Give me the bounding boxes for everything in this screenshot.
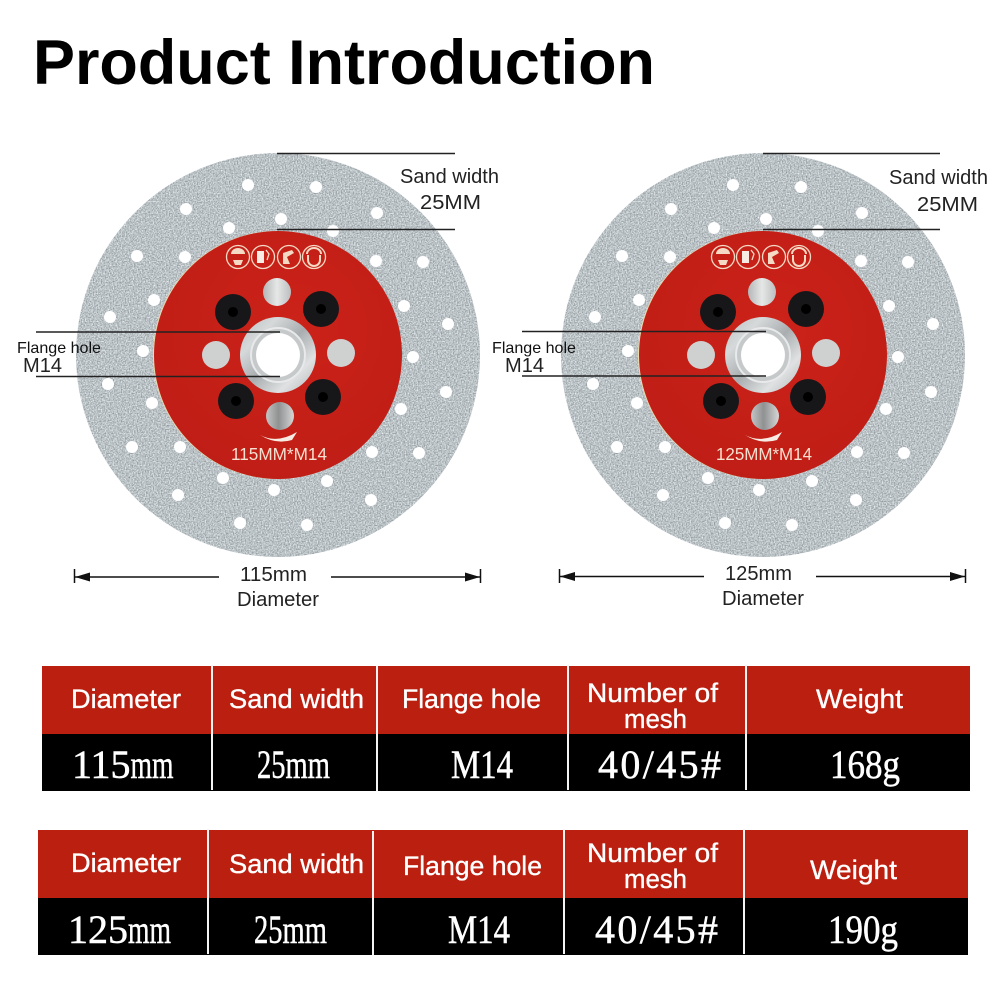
dimension: 115mm diameter: 115mm: [240, 563, 307, 586]
header labels: Diameter: [71, 684, 181, 714]
red centre label: [154, 231, 402, 479]
callout: right sand width: 25MM: [917, 193, 978, 216]
values: 25mm: [257, 742, 330, 787]
header row: [42, 666, 970, 734]
callout: left flange hole: [17, 332, 280, 377]
dimension: 115mm diameter: [74, 563, 481, 611]
header labels: Sand width: [229, 849, 364, 879]
callout: left sand width: Sand width: [400, 165, 499, 188]
values: 25mm: [254, 907, 327, 952]
header row: [38, 830, 968, 898]
value row: [42, 734, 970, 791]
values: 190g: [828, 907, 898, 952]
callout: right flange hole: [492, 332, 766, 377]
table: 125mm specs: [38, 829, 968, 955]
header labels: Number of: [587, 838, 719, 868]
values: [68, 907, 898, 952]
callout: left flange hole: Flange hole: [17, 340, 101, 357]
header labels: Number of: [587, 678, 719, 708]
safety icons: [226, 246, 326, 268]
dimension: 125mm diameter: Diameter: [722, 587, 804, 610]
header labels: Weight: [816, 684, 904, 714]
central flange hub: [240, 317, 316, 393]
callout: right sand width: Sand width: [889, 166, 988, 189]
bolts: [215, 291, 341, 419]
header labels: [71, 838, 898, 894]
values: M14: [451, 742, 513, 787]
disc size label: 125MM*M14: [716, 444, 812, 464]
values: M14: [448, 907, 510, 952]
dimension: 125mm diameter: 125mm: [725, 562, 792, 585]
ventilation holes: [587, 179, 939, 531]
header labels: mesh: [624, 704, 687, 734]
rotation arrow: [745, 432, 782, 442]
title: Product Introduction: [33, 28, 655, 98]
mounting slots: [748, 278, 776, 306]
cream edge: [638, 231, 886, 479]
header labels: mesh: [624, 864, 687, 894]
values: 40/45#: [595, 907, 718, 952]
panel: 115mm disc: [76, 153, 480, 557]
value row: [38, 898, 968, 955]
diamond abrasive ring: [561, 153, 965, 557]
header labels: Flange hole: [402, 684, 541, 714]
table: 115mm specs: [42, 665, 970, 791]
header labels: [71, 678, 904, 734]
callout: left sand width: [277, 154, 499, 230]
diamond abrasive ring: [76, 153, 480, 557]
panel: 125mm disc: [561, 153, 965, 557]
disc size label: 115MM*M14: [231, 444, 327, 464]
red centre label: [639, 231, 887, 479]
values: 115mm: [72, 742, 174, 787]
callout: left sand width: 25MM: [420, 191, 481, 214]
values: 168g: [830, 742, 900, 787]
dimension: 115mm diameter: Diameter: [237, 588, 319, 611]
ventilation holes: [102, 179, 454, 531]
central flange hub: [725, 317, 801, 393]
values: 125mm: [68, 907, 171, 952]
header labels: Flange hole: [403, 851, 542, 881]
safety icons: [712, 246, 810, 268]
values: 40/45#: [598, 742, 721, 787]
dimension: 125mm diameter: [559, 562, 966, 610]
callout: right flange hole: Flange hole: [492, 340, 576, 357]
callout: left flange hole: M14: [23, 354, 62, 377]
mounting slots: [263, 278, 291, 306]
values: [72, 742, 900, 787]
cream edge: [153, 231, 401, 479]
header labels: Weight: [810, 855, 898, 885]
callout: right sand width: [763, 154, 988, 230]
rotation arrow: [260, 432, 297, 442]
header labels: Diameter: [71, 848, 181, 878]
header labels: Sand width: [229, 684, 364, 714]
bolts: [700, 291, 826, 419]
callout: right flange hole: M14: [505, 354, 544, 377]
